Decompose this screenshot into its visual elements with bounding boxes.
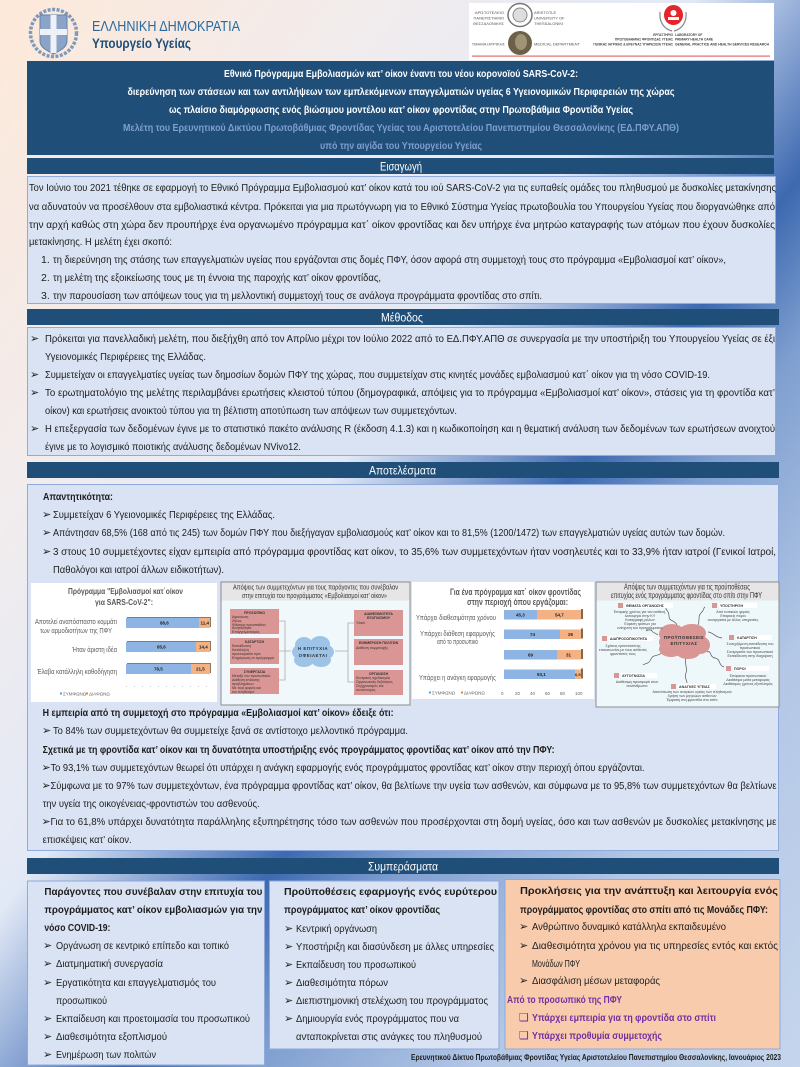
subtitle line 2: ως πλαίσιο διαμόρφωσης ενός βιώσιμου μοντέλου κατ’ οίκον φροντίδας στην Πρωτοβάθμια Φροντίδα Υγείας (169, 105, 633, 116)
panel: success factors: ➢ (43, 957, 52, 970)
panel: method: οίκον) και ερωτήσεις ανοικτού τύπου για τη βέλτιστη αποτύπωση των απόψεων των συμμετεχόντων. (45, 405, 457, 417)
box: informing citizens: Διάθεση συμμετοχής (356, 646, 388, 650)
bar chart: vaccination at home programme: 11,4 (200, 620, 210, 626)
panel: implementation conditions: Προϋποθέσεις εφαρμογής ενός ευρύτερου (284, 886, 497, 898)
item: support: συνεργασία με άλλες υπηρεσίες (708, 618, 759, 622)
item: training: Συνεχιζόμενη εκπαίδευση του (727, 642, 773, 646)
item: resources: Επάρκεια προσωπικού (730, 674, 766, 678)
university logo: ΘΕΣΣΑΛΟΝΙΚΗΣ (473, 21, 505, 26)
experience findings text: ➢ (42, 724, 51, 737)
bar chart: vaccination at home programme: Πρόγραμμα "Εμβολιασμοί κατ΄οίκον (68, 586, 183, 596)
experience findings text: την υγεία της οικογένειας-φροντιστών του ασθενούς. (43, 798, 260, 810)
panel: implementation conditions: ➢ (284, 994, 293, 1007)
panel: implementation conditions: ➢ (284, 922, 293, 935)
box: cooperation: τον πληθυσμό (232, 690, 254, 694)
cloud: success owed to (292, 636, 334, 667)
university logo: UNIVERSITY OF (534, 16, 565, 20)
response rate text: ➢ (42, 508, 51, 521)
item: training: Εκπαίδευση στην διαχείριση (728, 654, 772, 658)
item: organisation issues: Εύρεση τρόπων για (624, 622, 656, 626)
cloud: conditions of success: ΕΠΙΤΥΧΙΑΣ (670, 641, 698, 646)
bar chart: home care programme in my area: από το προσωπικό (437, 637, 478, 646)
box: cooperation: προβλημάτων (232, 682, 254, 686)
laboratory logo: ΓΕΝΙΚΗΣ ΙΑΤΡΙΚΗΣ & ΕΡΕΥΝΑΣ ΥΠΗΡΕΣΙΩΝ ΥΓΕΙΑΣ (593, 42, 673, 46)
panel: method: ➢ (30, 332, 39, 345)
university logo: ΑΡΙΣΤΟΤΕΛΕΙΟ (475, 10, 504, 15)
item: health needs: Χρήση των μητρώων ασθενών (668, 694, 717, 698)
bar chart: home care programme in my area: 60 (545, 691, 551, 696)
panel: challenges: ➢ (519, 974, 528, 987)
panel: method: ➢ (30, 386, 39, 399)
diagram: conditions for success: Απόψεις των συμμετεχόντων για τις προϋποθέσεις (624, 582, 750, 592)
item: health needs (652, 684, 732, 702)
header: Greek state and ministry (30, 10, 240, 56)
section bar: conclusions: Συμπεράσματα (368, 860, 438, 874)
panel: success factors: Οργάνωση σε κεντρικό επίπεδο και τοπικό (56, 940, 229, 952)
item: resources: Διαθέσιμος χρόνος εξοπλισμός (723, 682, 773, 686)
box: organisation: συντονισμός (356, 688, 376, 692)
response rate text: Παθολόγοι και ιατροί άλλων ειδικοτήτων). (53, 564, 224, 576)
bar chart: home care programme in my area: Για ένα πρόγραμμα κατ΄ οίκον φροντίδας (450, 587, 581, 597)
panel: success factors: Εκπαίδευση και προετοιμασία του προσωπικού (56, 1013, 250, 1025)
bar chart: home care programme in my area: 0 (501, 691, 504, 696)
bar chart: home care programme in my area: 100 (575, 691, 583, 696)
university logo (473, 4, 565, 26)
panel: challenges: ❑ (519, 1029, 529, 1042)
section bar: results (27, 462, 779, 478)
item: training: Συνεργασία του προσωπικού (727, 650, 773, 654)
medical department logo: ΤΜΗΜΑ ΙΑΤΡΙΚΗΣ (472, 42, 506, 46)
box: training: Εκπαίδευση (232, 644, 251, 648)
box: training: Ενημέρωση το πρόγραμμα (232, 656, 274, 660)
bar chart: vaccination at home programme: 21,5 (196, 666, 205, 672)
bar chart: vaccination at home programme: Αποτελεί αναπόσπαστο κομμάτι (35, 617, 117, 626)
panel: challenges: ➢ (519, 920, 528, 933)
auspices line: υπό την αιγίδα του Υπουργείου Υγείας (320, 141, 482, 152)
box: informing citizens (354, 639, 403, 665)
bar chart: home care programme in my area: ΣΥΜΦΩΝΩ (432, 690, 456, 696)
section bar: results: Αποτελέσματα (369, 464, 436, 478)
panel: challenges: Υπάρχει προθυμία συμμετοχής (532, 1030, 662, 1042)
laboratory logo: ΠΡΩΤΟΒΑΘΜΙΑΣ ΦΡΟΝΤΙΔΑΣ ΥΓΕΙΑΣ (615, 38, 673, 42)
box: cooperation (230, 668, 279, 694)
panel: implementation conditions: προγράμματος κατ’ οίκον φροντίδας (284, 904, 440, 916)
item: self-awareness: ΑΥΤΟΓΝΩΣΙΑ (622, 674, 645, 678)
item: organisation issues (614, 603, 673, 630)
response rate text (42, 491, 776, 576)
panel: implementation conditions: Δημιουργία ενός προγράμματος που να (296, 1013, 459, 1025)
box: equipment availability: Υλικά (356, 621, 365, 625)
panel: implementation conditions: Κεντρική οργάνωση (296, 923, 377, 935)
box: equipment availability (354, 610, 403, 636)
panel: challenges: Προκλήσεις για την ανάπτυξη και λειτουργία ενός (520, 885, 779, 897)
icon: national emblem (30, 10, 76, 56)
arrows from cloud (643, 607, 724, 683)
aims list: 1. (41, 254, 50, 266)
bar chart: home care programme in my area: στην περιοχή όπου εργάζομαι: (467, 597, 568, 607)
item: health needs: Αποτύπωση των αναγκών υγείας των πληθυσμού (652, 690, 732, 694)
box: training: προετοιμασία πριν (232, 652, 261, 656)
item: organisation issues: ΘΕΜΑΤΑ ΟΡΓΑΝΩΣΗΣ (626, 604, 665, 608)
experience findings text: ➢ (42, 761, 51, 774)
panel: implementation conditions: ➢ (284, 958, 293, 971)
experience findings text: Το 93,1% των συμμετεχόντων θεωρεί ότι υπάρχει η ανάγκη εφαρμογής ενός προγράμματος φροντίδας κατ’ οίκον στην περιοχή όπου εργάζονται. (50, 762, 644, 774)
bar chart: vaccination at home programme: ΣΥΜΦΩΝΩ (63, 692, 87, 696)
panel: implementation conditions: Υποστήριξη και διασύνδεση με άλλες υπηρεσίες (296, 941, 494, 953)
box: organisation: ΟΡΓΑΝΩΣΗ (369, 672, 389, 676)
box: organisation: Συγχρονισμός και (356, 684, 384, 688)
panel: introduction: την αρχή καθώς στη χώρα δεν προυπήρχε ένα οργανωμένο πρόγραμμα κατ΄ οίκον φροντίδας και δεν υπήρχε ένα μητρώο καταγραφής των ατόμων που έχουν δυσκολίες (29, 219, 775, 231)
panel: implementation conditions: ➢ (284, 1012, 293, 1025)
item: organisation issues: Επαρκής χρόνος για τον ασθενή, (614, 610, 666, 614)
item: resources: ΠΟΡΟΙ (734, 667, 746, 671)
aims list (41, 254, 726, 302)
panel: challenges (505, 880, 780, 1049)
box: staff: Επαγγελματισμός (232, 630, 260, 634)
heading: Hellenic Republic: ΕΛΛΗΝΙΚΗ ΔΗΜΟΚΡΑΤΙΑ (92, 18, 240, 35)
box: training: Κατάλληλη (232, 648, 249, 652)
medical department logo (472, 31, 580, 55)
panel: challenges: ❑ (519, 1011, 529, 1024)
box: organisation: Οργανωτικές δεξιότητες (356, 680, 393, 684)
aims list: τη μελέτη της εξοικείωσης τους με τη έννοια της παροχής κατ’ οίκον φροντίδας, (53, 272, 381, 284)
box: organisation (354, 670, 403, 695)
item: support: Επαρκείς πόροι (720, 614, 746, 618)
section bar: conclusions (27, 858, 779, 874)
box: training (230, 638, 279, 664)
bar chart: vaccination at home programme: των αρμοδιοτήτων της ΠΦΥ (40, 626, 112, 635)
response rate text: Συμμετείχαν 6 Υγειονομικές Περιφέρειες της Ελλάδας. (53, 509, 275, 521)
section bar: method: Μέθοδος (381, 310, 423, 324)
laboratory logo: PRIMARY HEALTH CARE (675, 38, 713, 42)
panel: method (28, 328, 776, 456)
bar chart: home care programme in my area (412, 582, 594, 699)
section bar: introduction: Εισαγωγή (380, 160, 422, 174)
bar chart: vaccination at home programme: Ήταν άριστη ιδέα (71, 645, 118, 654)
cloud: conditions of success (659, 624, 710, 659)
bar chart: vaccination at home programme (31, 583, 217, 702)
bar chart: home care programme in my area: 54,7 (555, 612, 564, 618)
panel: challenges: Μονάδων ΠΦΥ (532, 958, 580, 970)
box: equipment availability: ΕΞΟΠΛΙΣΜΟΥ (367, 616, 391, 620)
aims list: την παρουσίαση των απόψεων τους για τη μελλοντική συμμετοχή τους σε ανάλογα προγράμματα φροντίδας στο σπίτι. (53, 290, 542, 302)
panel: success factors: Εργατικότητα και επαγγελματισμός του (56, 977, 216, 989)
bar chart: vaccination at home programme: ΔΙΑΦΩΝΩ (89, 692, 110, 696)
bar chart: home care programme in my area: Υπάρχει η ανάγκη εφαρμογής (419, 673, 496, 682)
experience findings text: επισκέψεις κατ’ οίκον. (43, 834, 132, 846)
laboratory logo: GENERAL PRACTICE AND HEALTH SERVICES RESEARCH (675, 42, 770, 46)
medical department logo: MEDICAL DEPARTMENT (534, 42, 580, 46)
bar chart: vaccination at home programme: 78,5 (154, 666, 163, 672)
box: organisation: Κεντρικός σχεδιασμός (356, 676, 391, 680)
panel: implementation conditions: Διεπιστημονική στελέχωση του προγράμματος (296, 995, 488, 1007)
panel: implementation conditions: ➢ (284, 976, 293, 989)
item: training: προσωπικού (740, 646, 760, 650)
experience findings text (42, 707, 777, 846)
diagram: success factors: Απόψεις των συμμετεχόντων για τους παράγοντες που συνέβαλαν (233, 582, 398, 592)
item: support: Από τοπικούς φορείς (716, 610, 750, 614)
response rate text: ➢ (42, 545, 51, 558)
aims list: τη διερεύνηση της στάσης των επαγγελματιών υγείας που εργάζονται στις δομές ΠΦΥ, όσον αφορά στη συμμετοχή τους στο πρόγραμμα «Εμβολιασμοί κατ’ οίκον», (53, 254, 726, 266)
panel: method: Υγειονομικές Περιφέρειες της Ελλάδας. (45, 351, 206, 363)
university logo: ARISTOTLE (534, 10, 556, 15)
aims list: 2. (41, 272, 50, 284)
box: staff: Κινητικότητα (232, 626, 251, 630)
panel: implementation conditions (270, 881, 499, 1049)
panel: introduction (28, 176, 776, 304)
panel: challenges: ➢ (519, 939, 528, 952)
box: cooperation: Με τους φορείς και (232, 686, 261, 690)
university logo: THESSALONIKI (534, 21, 563, 26)
experience findings text: Η εμπειρία από τη συμμετοχή στο πρόγραμμα «Εμβολιασμοί κατ’ οίκον» έδειξε ότι: (43, 707, 394, 719)
title panel (27, 61, 774, 155)
panel: challenges: Υπάρχει εμπειρία για τη φροντίδα στο σπίτι (532, 1012, 716, 1024)
box: staff: Αφοσίωση (232, 615, 248, 619)
bar chart: vaccination at home programme: 14,4 (199, 644, 208, 650)
item: training: ΚΑΤΑΡΤΙΣΗ (737, 636, 757, 640)
experience findings text: ➢ (42, 779, 51, 792)
panel: method: έγινε με το λογισμικό ποιοτικής ανάλυσης δεδομένων NVivo12. (45, 441, 301, 453)
box: staff: Ζήλος (232, 619, 242, 623)
subtitle line 1: διερεύνηση των στάσεων και των αντιλήψεων των εμπλεκόμενων επαγγελματιών υγείας 6 Υγειονομικών Περιφερειών της χώρας (128, 87, 674, 98)
panel: success factors: προγράμματος κατ’ οίκον εμβολιασμών για την (44, 904, 263, 916)
panel: introduction: μετακίνησης. Η μελέτη έχει σκοπό: (29, 236, 172, 248)
laboratory logo (593, 5, 770, 46)
panel: results (28, 484, 779, 850)
panel: challenges: Διαθεσιμότητα χρόνου για τις υπηρεσίες εντός και εκτός (532, 940, 778, 952)
study attribution: Μελέτη του Ερευνητικού Δικτύου Πρωτοβάθμιας Φροντίδας Υγείας του Αριστοτελείου Πανεπιστημίου Θεσσαλονίκης (ΕΔ.ΠΦΥ.ΑΠΘ) (123, 123, 679, 134)
item: interpersonal: επικοινωνίας με τους ασθενείς (599, 648, 647, 652)
bar chart: home care programme in my area: 31 (566, 652, 572, 658)
item: self-awareness (614, 673, 658, 688)
title text: Εθνικό Πρόγραμμα Εμβολιασμών κατ’ οίκον έναντι του νέου κορονοϊού SARS-CoV-2: (224, 69, 578, 80)
bar chart: vaccination at home programme: Έλαβα κατάλληλη καθοδήγηση (36, 667, 117, 676)
item: organisation issues: Καταγραφή ρόλων (625, 618, 655, 622)
diagram: success factors (221, 582, 410, 705)
panel: success factors: προσωπικού (56, 995, 107, 1007)
bar chart: home care programme in my area: 45,3 (516, 612, 525, 618)
item: support: ΥΠΟΣΤΗΡΙΞΗ (720, 604, 743, 608)
panel: success factors: Παράγοντες που συνέβαλαν στην επιτυχία του (44, 886, 262, 898)
panel: success factors: Διατμηματική συνεργασία (56, 958, 163, 970)
bar chart: home care programme in my area: 74 (530, 632, 536, 637)
box: staff: ΠΡΟΣΩΠΙΚΟ (244, 611, 265, 615)
panel: challenges: Ανθρώπινο δυναμικό κατάλληλα εκπαιδευμένο (532, 921, 726, 933)
experience findings text: ➢ (42, 815, 51, 828)
panel: implementation conditions: Εκπαίδευση του προσωπικού (296, 959, 416, 971)
panel: success factors: ➢ (43, 939, 52, 952)
response rate text: ➢ (42, 526, 51, 539)
box: equipment availability: ΔΙΑΘΕΣΙΜΟΤΗΤΑ (364, 612, 393, 616)
item: interpersonal: Σχέσεις εμπιστοσύνης (605, 644, 641, 648)
item: interpersonal (599, 636, 653, 656)
bar chart: vaccination at home programme: 88,6 (160, 620, 169, 626)
panel: method: ➢ (30, 422, 39, 435)
bar chart: home care programme in my area: 26 (568, 632, 574, 637)
bar chart: home care programme in my area: 69 (528, 652, 534, 658)
box: cooperation: Μεταξύ του προσωπικού (232, 674, 270, 678)
bar chart: home care programme in my area: Υπάρχει διαθεσιμότητα χρόνου (416, 613, 496, 622)
item: self-awareness: Διαθέσιμη προσφορά στον (616, 680, 658, 684)
diagram: conditions for success (596, 582, 779, 707)
panel: method: ➢ (30, 368, 39, 381)
panel: success factors: ➢ (43, 976, 52, 989)
panel: success factors (28, 881, 264, 1065)
bar chart: home care programme in my area: 93,1 (537, 672, 546, 677)
item: interpersonal: ΔΙΑΠΡΟΣΩΠΙΚΟΤΗΤΑ (610, 637, 648, 641)
aims list: 3. (41, 290, 50, 302)
logos panel (469, 3, 774, 60)
section bar: introduction (27, 158, 774, 174)
box: informing citizens: ΕΝΗΜΕΡΩΣΗ ΠΟΛΙΤΩΝ (359, 641, 399, 645)
laboratory logo: LABORATORY OF (675, 33, 702, 37)
university logo: ΠΑΝΕΠΙΣΤΗΜΙΟ (474, 16, 504, 20)
experience findings text: Σχετικά με τη φροντίδα κατ’ οίκον και τη δυνατότητα υποστήριξης ενός προγράμματος φροντίδας κατ’ οίκον από την ΠΦΥ: (43, 744, 555, 756)
item: training (727, 635, 773, 658)
item: self-awareness: συνάνθρωπο (626, 684, 648, 688)
panel: implementation conditions: ανταποκρίνεται στις ανάγκες του πληθυσμού (296, 1031, 482, 1043)
heading: Ministry of Health: Υπουργείο Υγείας (92, 35, 191, 51)
panel: success factors: νόσο COVID-19: (44, 922, 110, 934)
panel: implementation conditions: Διαθεσιμότητα πόρων (296, 977, 388, 989)
cloud: conditions of success: ΠΡΟΫΠΟΘΕΣΕΙΣ (664, 634, 704, 640)
bar chart: home care programme in my area: Υπάρχει διάθεση εφαρμογής (420, 629, 495, 638)
panel: implementation conditions: ➢ (284, 940, 293, 953)
bar chart: home care programme in my area: 80 (560, 691, 566, 696)
bar chart: vaccination at home programme: 85,6 (157, 644, 166, 650)
panel: success factors: ➢ (43, 1012, 52, 1025)
diagram: success factors: στην επιτυχία του προγράμματος «Εμβολιασμοί κατ’ οίκον» (242, 591, 387, 600)
laboratory logo: ΕΡΓΑΣΤΗΡΙΟ (653, 33, 674, 37)
section bar: method (27, 309, 779, 325)
panel: success factors: ➢ (43, 1030, 52, 1043)
cloud: success owed to: ΟΦΕΙΛΕΤΑΙ (299, 653, 327, 658)
item: resources: Διαθέσιμα μέσα μεταφοράς (726, 678, 770, 682)
item: organisation issues: ενίσχυση του προγράμματος (617, 626, 663, 630)
panel: challenges: Από το προσωπικό της ΠΦΥ (507, 994, 622, 1006)
bar chart: home care programme in my area: 6,9 (575, 672, 581, 677)
panel: method: Συμμετείχαν οι επαγγελματίες υγείας των δημοσίων δομών ΠΦΥ της χώρας, που συμμετείχαν στις κινητές μονάδες εμβολιασμού κατ΄ οίκον για τη νόσο COVID-19. (45, 369, 710, 381)
panel: success factors: ➢ (43, 1048, 52, 1061)
panel: success factors: Ενημέρωση των πολιτών (56, 1049, 156, 1061)
box: cooperation: Διάθεση επίλυσης (232, 678, 260, 682)
box: staff: Φιλότιμη προσπάθεια (232, 623, 265, 627)
item: interpersonal: φροντιστές τους (610, 652, 636, 656)
item: health needs: Έμφαση στη φροντίδα στο σπίτι (666, 698, 718, 702)
item: organisation issues: λειτουργία στην ΚΥ (625, 614, 656, 618)
box: staff (230, 609, 279, 634)
bar chart: home care programme in my area: ΔΙΑΦΩΝΩ (464, 690, 485, 696)
bar chart: home care programme in my area: 40 (530, 691, 536, 696)
item: resources (723, 666, 773, 686)
experience findings text: Το 84% των συμμετεχόντων θα συμμετείχε ξανά σε αντίστοιχο μελλοντικό πρόγραμμα. (53, 725, 408, 737)
box: cooperation: ΣΥΝΕΡΓΑΣΙΑ (244, 670, 266, 674)
bar chart: home care programme in my area: 20 (515, 691, 521, 696)
bar chart: vaccination at home programme: για SARS-CoV-2": (95, 597, 153, 607)
panel: challenges: Διασφάλιση μέσων μεταφοράς (532, 975, 660, 987)
box: training: ΚΑΤΑΡΤΙΣΗ (245, 640, 265, 644)
item: support (708, 603, 759, 622)
item: health needs: ΑΝΑΓΚΕΣ ΥΓΕΙΑΣ (679, 685, 711, 689)
cloud: success owed to: Η ΕΠΙΤΥΧΙΑ (298, 646, 328, 651)
response rate text: Απαντητικότητα: (43, 491, 113, 503)
panel: success factors: Διαθεσιμότητα εξοπλισμού (56, 1031, 167, 1043)
